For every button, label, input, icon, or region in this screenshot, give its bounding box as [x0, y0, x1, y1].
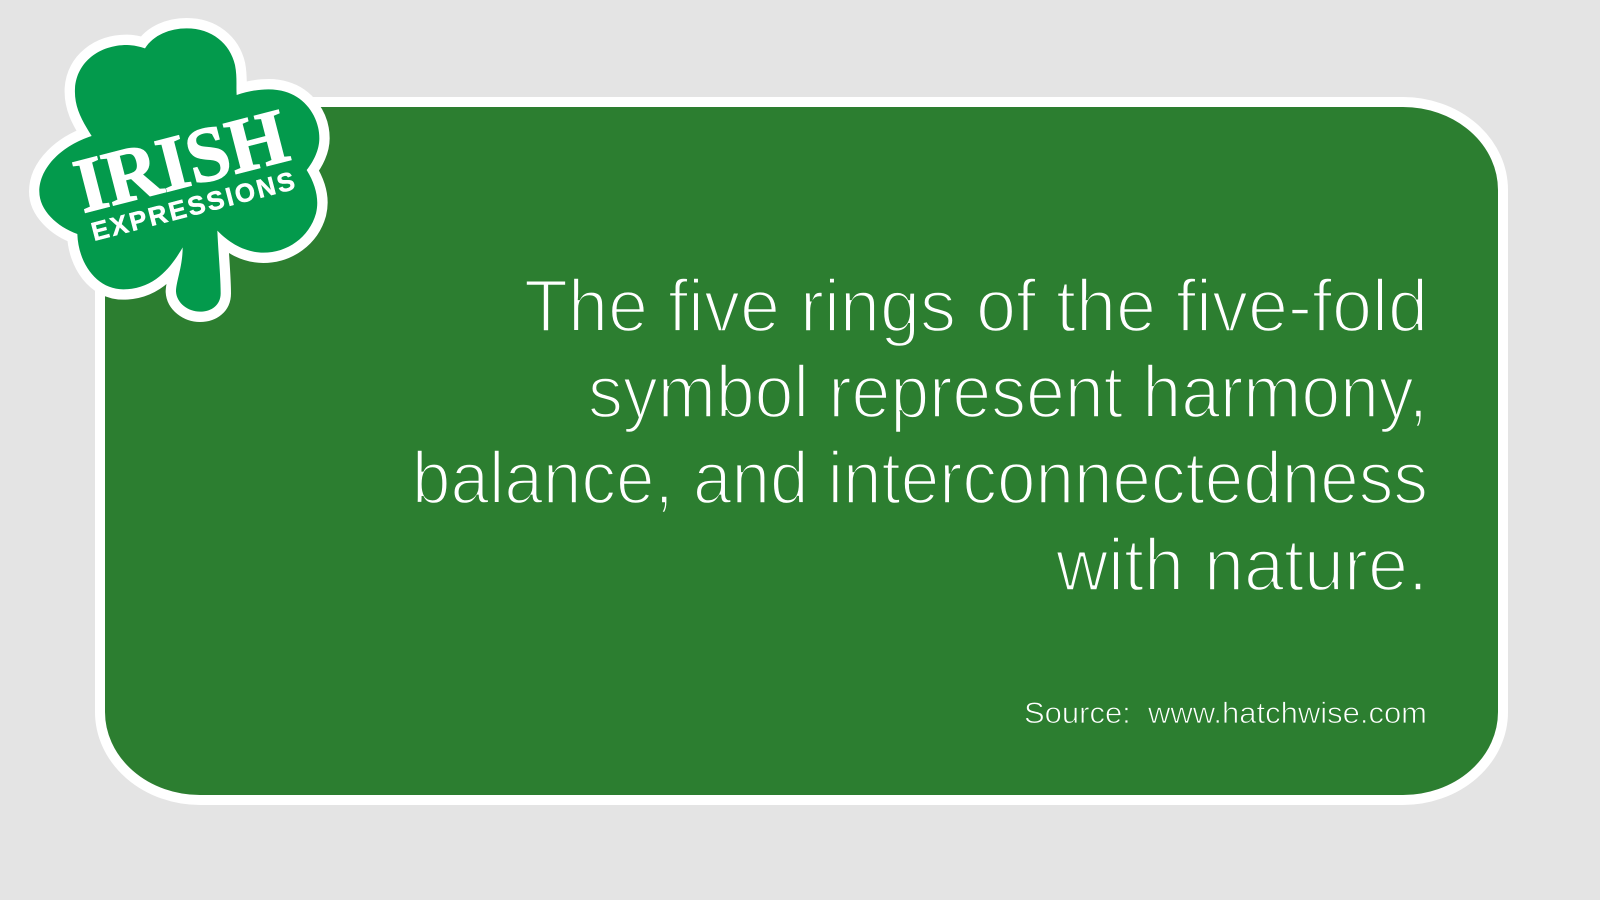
- source line: Source: www.hatchwise.com: [1024, 697, 1427, 730]
- quote text: [412, 264, 1428, 606]
- panel: green rounded card: [100, 102, 1503, 800]
- logo: Irish Expressions shamrock: [39, 28, 319, 312]
- quote text: symbol represent harmony,: [588, 350, 1428, 434]
- logo word: IRISH: IRISH: [66, 91, 296, 229]
- logo word: EXPRESSIONS: EXPRESSIONS: [88, 165, 298, 247]
- icon: shamrock: [39, 28, 319, 312]
- quote text: The five rings of the five-fold: [524, 264, 1428, 348]
- quote text: with nature.: [1055, 524, 1428, 606]
- quote text: balance, and interconnectedness: [412, 436, 1428, 520]
